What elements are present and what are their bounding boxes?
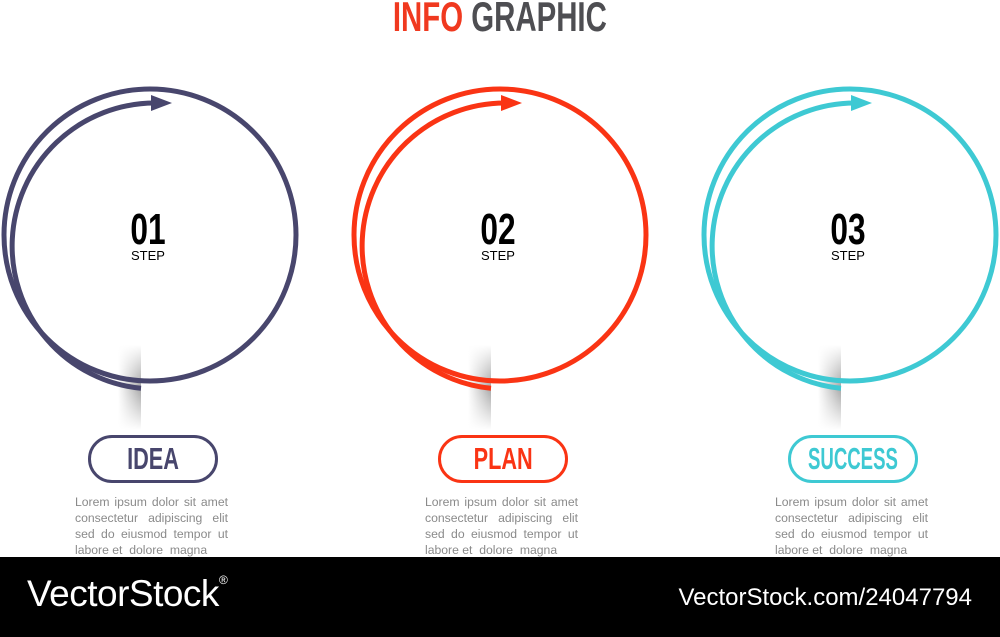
- text block 1: Lorem ipsum dolor sit amet consectetur adipiscing elit sed do eiusmod tempor ut labore et dolore magna: [75, 495, 228, 557]
- label: IDEA: IDEA: [127, 441, 179, 476]
- text block 2: Lorem ipsum dolor sit amet consectetur adipiscing elit sed do eiusmod tempor ut labore et dolore magna: [425, 495, 578, 557]
- label: IDEA: [88, 435, 218, 483]
- text block 3: Lorem ipsum dolor sit amet consectetur adipiscing elit sed do eiusmod tempor ut labore et dolore magna: [775, 495, 928, 557]
- footer url: VectorStock.com/24047794: [678, 584, 972, 611]
- step 2 circle: 02: [480, 205, 516, 254]
- step 2 circle: STEP: [481, 248, 515, 263]
- label: PLAN: PLAN: [473, 441, 533, 476]
- step 3 circle: 03: [830, 205, 866, 254]
- label: PLAN: [438, 435, 568, 483]
- footer logo: VectorStock®: [27, 573, 227, 614]
- footer bar: [0, 557, 1000, 637]
- step 3 circle: [704, 89, 996, 430]
- step 2 circle: [354, 89, 646, 430]
- step 1 circle: 01: [130, 205, 166, 254]
- step 1 circle: STEP: [131, 248, 165, 263]
- label: SUCCESS: [788, 435, 918, 483]
- step 1 circle: [4, 89, 296, 430]
- label: SUCCESS: SUCCESS: [808, 441, 898, 476]
- step 3 circle: STEP: [831, 248, 865, 263]
